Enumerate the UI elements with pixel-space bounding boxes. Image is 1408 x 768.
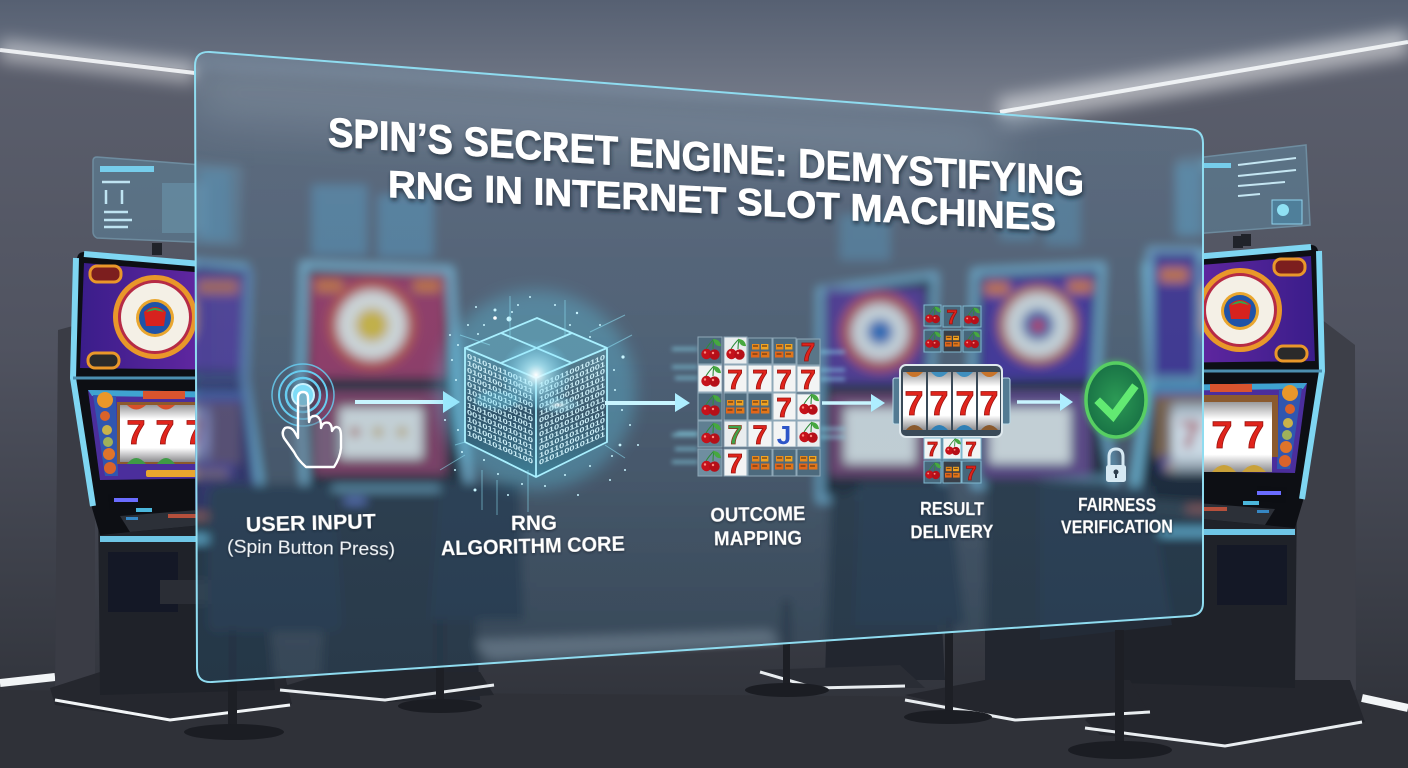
chairs and stools bbox=[160, 482, 1172, 759]
result delivery: small symbols above bbox=[924, 305, 981, 352]
cube left face: 1001011010011 bbox=[467, 358, 533, 396]
right hologram sign bbox=[1178, 145, 1310, 246]
result delivery: small symbols below: 7 bbox=[927, 439, 938, 461]
glass panel bbox=[194, 51, 1204, 683]
cube right face: 0101100101101 bbox=[539, 429, 605, 467]
result delivery: reel window with 7777: 7 bbox=[905, 385, 923, 423]
cube right face: 1010011001011 bbox=[539, 394, 605, 432]
cube right face: 0110100101001 bbox=[539, 359, 605, 397]
cube right face: 1001101011010 bbox=[539, 366, 605, 404]
outcome mapping symbol grid: 7 bbox=[727, 364, 743, 395]
label: rng algorithm core bbox=[441, 512, 625, 560]
outer right slot machine: 7 bbox=[1211, 415, 1233, 457]
outer left slot machine: 7 bbox=[156, 414, 174, 452]
result delivery: small symbols below bbox=[924, 438, 981, 485]
label: outcome mapping bbox=[710, 503, 806, 550]
inner left-edge machine continuation bbox=[195, 170, 260, 510]
inner left machine (seen through glass) bbox=[278, 185, 494, 702]
outer left slot machine bbox=[73, 243, 275, 695]
cube right face: 0101001101101 bbox=[539, 373, 605, 411]
result delivery: small symbols below: 7 bbox=[965, 439, 977, 461]
outcome mapping symbol grid: 7 bbox=[752, 364, 768, 395]
inner right machines (seen through glass) bbox=[760, 165, 1200, 720]
label: rng algorithm core: RNG bbox=[511, 512, 557, 535]
label: fairness verification bbox=[1061, 495, 1173, 537]
label: result delivery: DELIVERY bbox=[910, 522, 994, 542]
cube right face: 1011010011001 bbox=[539, 422, 605, 460]
cube left face: 0110010110011 bbox=[467, 379, 533, 417]
outcome mapping symbol grid: 7 bbox=[727, 420, 743, 450]
result delivery: reel window with 7777: 7 bbox=[980, 385, 998, 423]
cube left face: 1100101001100 bbox=[467, 372, 533, 410]
cube right face: 0110101010110 bbox=[539, 401, 605, 439]
icon: padlock bbox=[1106, 449, 1126, 482]
outer right slot machine bbox=[1120, 236, 1322, 688]
left hologram sign bbox=[93, 157, 240, 244]
outcome mapping symbol grid bbox=[672, 337, 845, 479]
cube right face: 1010110010110 bbox=[539, 352, 605, 390]
label: fairness verification: FAIRNESS bbox=[1078, 495, 1156, 515]
outcome mapping symbol grid: 7 bbox=[727, 448, 743, 479]
cube right face: 0011010110100 bbox=[539, 387, 605, 425]
label: user input bbox=[227, 510, 395, 559]
cube left face: 0110101100110 bbox=[467, 351, 533, 389]
result delivery: reel window with 7777 bbox=[893, 365, 1010, 437]
outcome mapping symbol grid: 7 bbox=[752, 420, 768, 450]
label: result delivery: RESULT bbox=[920, 499, 984, 519]
label: user input: USER INPUT bbox=[246, 510, 376, 537]
arrow: delivery to verification bbox=[1017, 393, 1073, 411]
arrow: mapping to delivery bbox=[822, 394, 885, 412]
cube left face: 1001101001100 bbox=[467, 428, 533, 466]
cube right face: 1100110010011 bbox=[539, 380, 605, 418]
icon: RNG cube bbox=[436, 290, 639, 515]
cube left face: 0011010010110 bbox=[467, 407, 533, 445]
result delivery: reel window with 7777: 7 bbox=[956, 385, 974, 423]
result delivery: small symbols above: 7 bbox=[946, 307, 958, 329]
label: rng algorithm core: ALGORITHM CORE bbox=[441, 533, 625, 560]
cube right face bbox=[536, 348, 607, 477]
result delivery: reel window with 7777: 7 bbox=[930, 385, 948, 423]
icon: hand pressing spin button bbox=[272, 364, 341, 467]
label: result delivery bbox=[910, 499, 994, 542]
arrow: input to RNG bbox=[355, 391, 460, 413]
result delivery: small symbols below: 7 bbox=[965, 463, 977, 485]
outer right slot machine: 7 bbox=[1179, 415, 1201, 457]
cube left face: 1011001010110 bbox=[467, 386, 533, 424]
outer left slot machine: 7 bbox=[186, 414, 204, 452]
label: fairness verification: VERIFICATION bbox=[1061, 517, 1173, 537]
title: SPIN’S SECRET ENGINE: DEMYSTIFYING bbox=[328, 109, 1084, 205]
label: outcome mapping: OUTCOME bbox=[710, 503, 806, 527]
title: RNG IN INTERNET SLOT MACHINES bbox=[388, 164, 1056, 239]
outcome mapping symbol grid: J bbox=[777, 420, 791, 450]
cube left face: 1010110100101 bbox=[467, 414, 533, 452]
label: outcome mapping: MAPPING bbox=[714, 528, 802, 550]
cube right face: 0010110101010 bbox=[539, 415, 605, 453]
cube right face: 1101001100101 bbox=[539, 408, 605, 446]
icon: green check bbox=[1082, 359, 1150, 441]
outcome mapping symbol grid: 7 bbox=[800, 364, 816, 395]
cube left face: 1101001011010 bbox=[467, 400, 533, 438]
cube left face: 0110011010011 bbox=[467, 421, 533, 459]
label: user input: (Spin Button Press) bbox=[227, 537, 395, 559]
outcome mapping symbol grid: 7 bbox=[776, 392, 792, 423]
cube left face: 0100110101001 bbox=[467, 393, 533, 431]
cube left face: 0101100110101 bbox=[467, 365, 533, 403]
outcome mapping symbol grid: 7 bbox=[801, 337, 815, 367]
cube left face bbox=[465, 348, 536, 477]
outer left slot machine: 7 bbox=[127, 414, 145, 452]
outer right slot machine: 7 bbox=[1243, 415, 1265, 457]
arrow: RNG to mapping bbox=[605, 393, 690, 412]
outcome mapping symbol grid: 7 bbox=[776, 364, 792, 395]
